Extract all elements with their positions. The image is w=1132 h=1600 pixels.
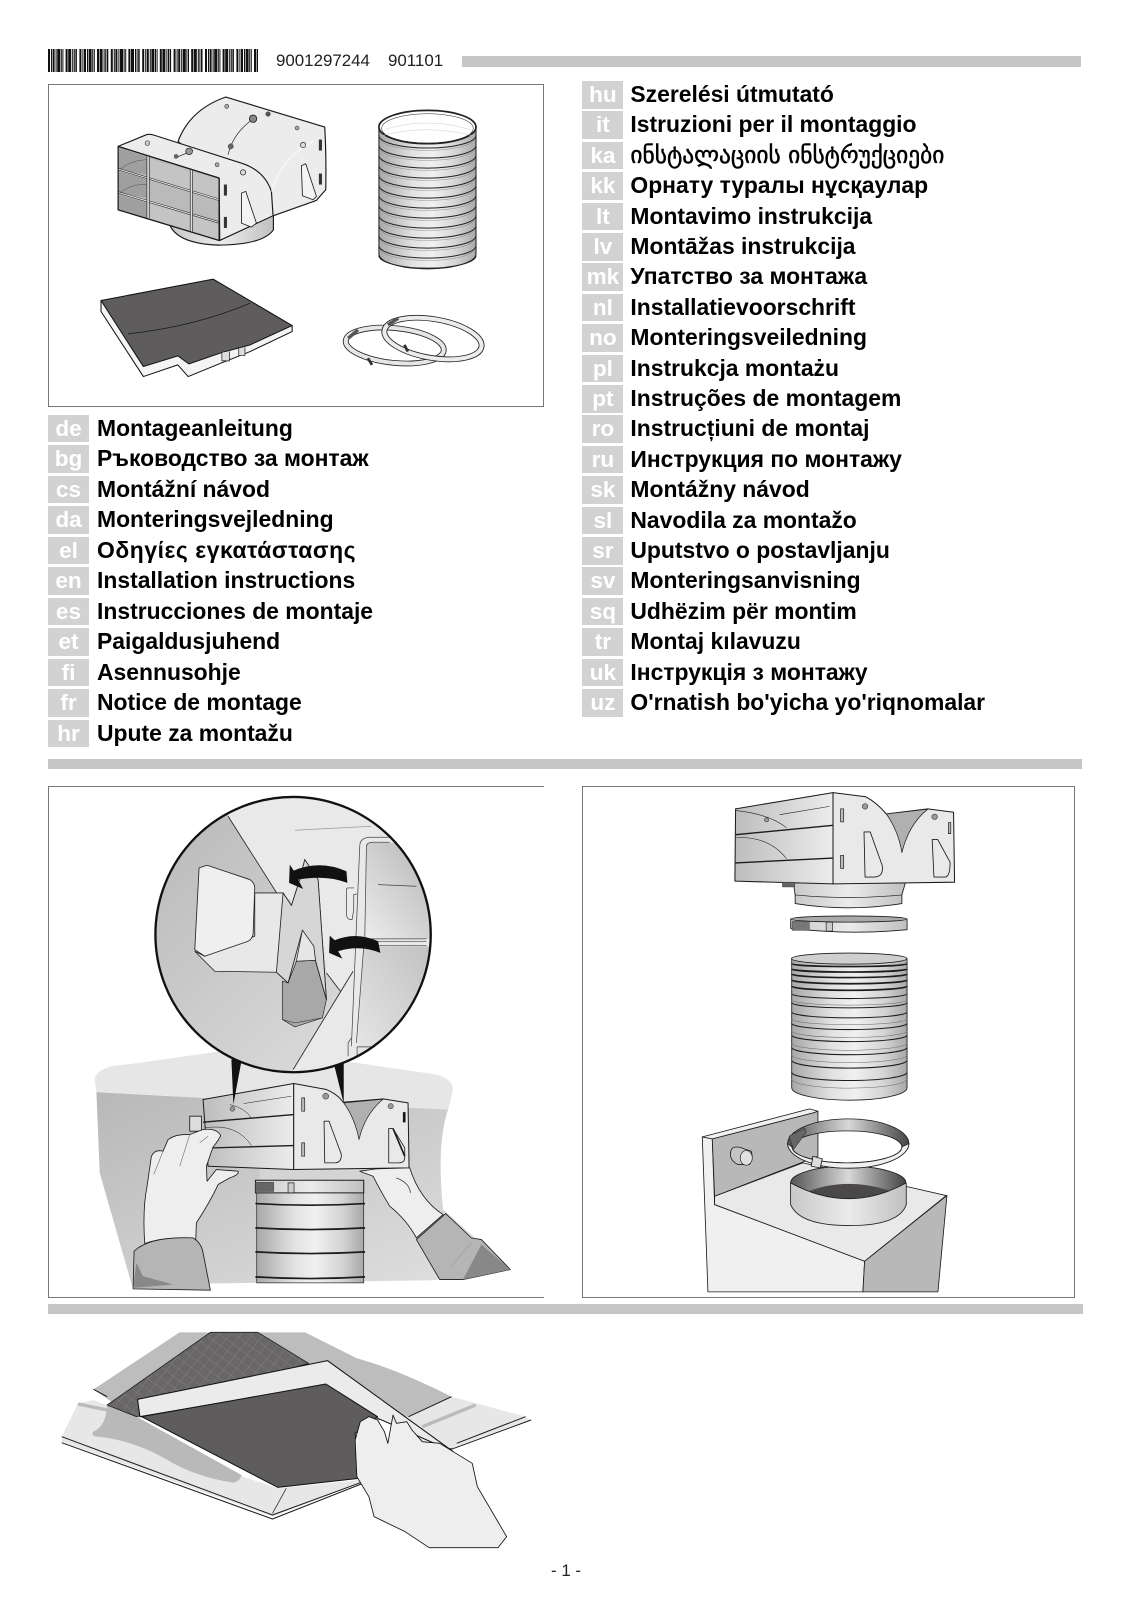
barcode (48, 49, 258, 72)
row: sr: Uputstvo o postavljanju (630, 537, 890, 563)
row: kk: Орнату туралы нұсқаулар (630, 172, 928, 198)
row: nl: nl (593, 295, 613, 320)
row: fr: Notice de montage (97, 689, 302, 715)
row: cs: cs (56, 477, 81, 502)
row: ro: Instrucțiuni de montaj (630, 415, 869, 441)
row: tr: Montaj kılavuzu (630, 628, 801, 654)
panel: parts overview (48, 84, 544, 407)
row: en: en (55, 568, 82, 593)
row: no: no (589, 325, 617, 350)
row: ka: ინსტალაციის ინსტრუქციები (630, 141, 944, 169)
row: pt: Instruções de montagem (630, 385, 901, 411)
row: uz: uz (590, 690, 615, 715)
row: lt: Montavimo instrukcija (630, 203, 872, 229)
row: ru: ru (592, 447, 614, 472)
row: el: el (59, 538, 78, 563)
row: it: it (596, 112, 610, 137)
row: uk: Інструкція з монтажу (630, 659, 868, 685)
row: cs: Montážní návod (97, 476, 270, 502)
row: es: es (56, 599, 81, 624)
row: it: Istruzioni per il montaggio (630, 111, 917, 137)
icon: duct elbow (118, 97, 326, 245)
grease filter mesh (108, 1332, 309, 1417)
row: fi: Asennusohje (97, 659, 241, 685)
magnifier pointers (231, 1060, 344, 1105)
row: ro: ro (592, 416, 614, 441)
hand: left (133, 1129, 238, 1290)
panel: step 2 exploded assembly (582, 786, 1075, 1298)
row: uz: O'rnatish bo'yicha yo'riqnomalar (630, 689, 985, 715)
wall background (95, 1050, 510, 1290)
panel: step 1 fitting the duct (48, 786, 544, 1298)
row: mk: mk (587, 264, 619, 289)
header bar (462, 56, 1081, 66)
page number: - 1 - (551, 1561, 581, 1580)
row: sr: sr (592, 538, 614, 563)
row: sl: Navodila za montažo (630, 507, 857, 533)
row: ka: ka (590, 143, 615, 168)
row: mk: Упатство за монтажа (630, 263, 867, 289)
row: da: Monteringsvejledning (97, 506, 334, 532)
row: da: da (55, 507, 82, 532)
row: ru: Инструкция по монтажу (630, 446, 902, 472)
row: hr: Upute za montažu (97, 720, 293, 746)
panel: step 3 fitting the filter (62, 1332, 532, 1548)
row: hu: hu (589, 82, 617, 107)
row: de: Montageanleitung (97, 415, 293, 441)
date code: 901101 (388, 51, 443, 70)
row: pl: pl (593, 356, 613, 381)
row: uk: uk (590, 660, 616, 685)
duct in hands (190, 1084, 409, 1170)
row: el: Οδηγίες εγκατάστασης (97, 537, 356, 563)
row: en: Installation instructions (97, 567, 355, 593)
row: sv: sv (590, 568, 615, 593)
hose with clamp (255, 1169, 365, 1283)
row: sv: Monteringsanvisning (630, 567, 861, 593)
row: kk: kk (590, 173, 615, 198)
row: pl: Instrukcja montażu (630, 355, 839, 381)
section bar (48, 1304, 1083, 1314)
hob base with bracket (702, 1109, 947, 1292)
row: sk: sk (590, 477, 615, 502)
row: bg: Ръководство за монтаж (97, 445, 369, 471)
row: hu: Szerelési útmutató (630, 81, 834, 107)
cooker hood underside (62, 1332, 531, 1519)
row: lt: lt (596, 204, 610, 229)
row: no: Monteringsveiledning (630, 324, 867, 350)
row: sq: Udhëzim për montim (630, 598, 857, 624)
row: et: Paigaldusjuhend (97, 628, 280, 654)
magnifier detail (155, 793, 436, 1072)
document number: 9001297244 (276, 51, 370, 70)
icon: flexible hose (379, 110, 476, 269)
row: lv: Montāžas instrukcija (630, 233, 856, 259)
row: tr: tr (595, 629, 611, 654)
language list: right column (582, 81, 985, 717)
lower clamp (787, 1119, 909, 1168)
filter pad (138, 1361, 454, 1487)
icon: charcoal filter (101, 279, 292, 376)
row: sq: sq (590, 599, 616, 624)
duct (735, 793, 954, 908)
row: bg: bg (55, 446, 82, 471)
hand (355, 1415, 507, 1548)
row: pt: pt (592, 386, 614, 411)
flexible hose (791, 953, 907, 1100)
icon: hose clamps (344, 311, 485, 368)
section bar (48, 759, 1082, 768)
row: sk: Montážny návod (630, 476, 810, 502)
row: et: et (58, 629, 79, 654)
language list: left column (48, 415, 373, 747)
row: fr: fr (60, 690, 77, 715)
hand: right (360, 1168, 510, 1280)
row: de: de (55, 416, 82, 441)
row: nl: Installatievoorschrift (630, 294, 856, 320)
row: hr: hr (57, 721, 80, 746)
row: sl: sl (593, 508, 612, 533)
row: lv: lv (593, 234, 612, 259)
row: fi: fi (62, 660, 75, 685)
row: es: Instrucciones de montaje (97, 598, 373, 624)
upper clamp (791, 916, 907, 932)
